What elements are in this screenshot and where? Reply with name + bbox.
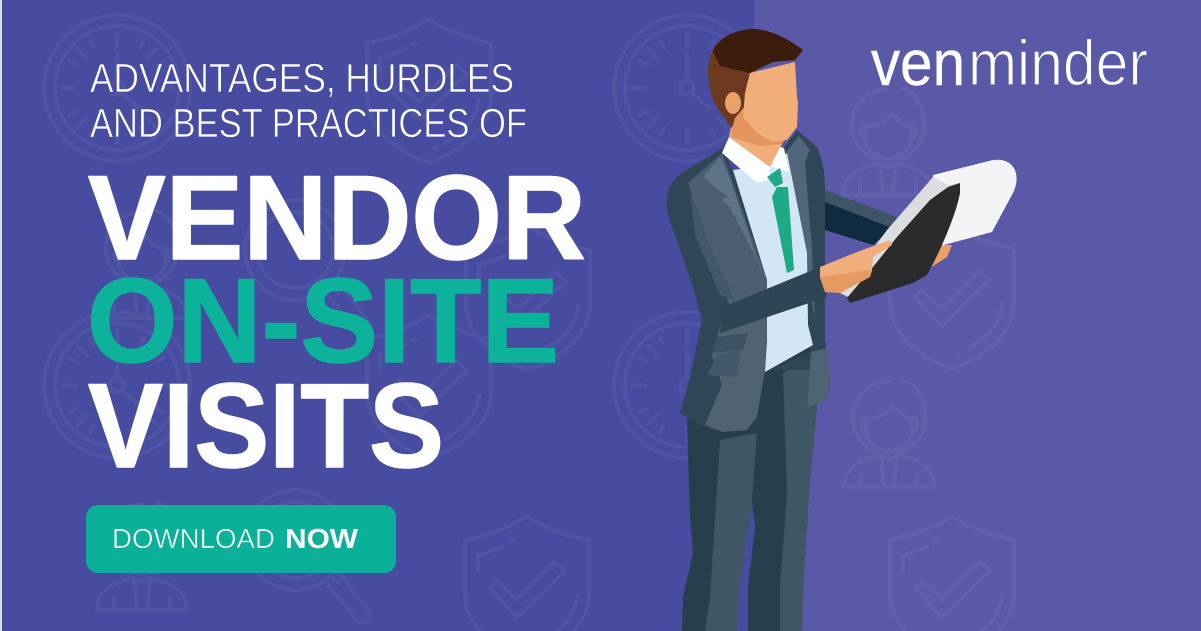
ear bbox=[725, 92, 741, 114]
button background bbox=[86, 505, 396, 573]
icon: shield right column left panel bbox=[466, 226, 590, 370]
tie bbox=[767, 168, 794, 273]
pocket flap bbox=[712, 333, 748, 353]
title line: visits: VISITS bbox=[88, 359, 444, 493]
intro line two: AND BEST PRACTICES OF bbox=[90, 100, 527, 146]
icon: person right panel upper bbox=[843, 88, 934, 195]
logo: venminder: ven bbox=[871, 27, 965, 99]
icon: shield middle bbox=[367, 315, 491, 459]
logo: venminder: minder bbox=[968, 27, 1148, 99]
trousers bbox=[682, 345, 817, 631]
tablet back bbox=[847, 183, 960, 303]
heading: intro lines bbox=[90, 55, 527, 146]
button label: DOWNLOAD bbox=[112, 523, 275, 554]
watermark icons bbox=[44, 15, 1014, 631]
icon: shield right panel lower bbox=[890, 516, 1014, 631]
tablet edge bbox=[840, 177, 960, 297]
icon: clock top left bbox=[44, 15, 190, 161]
left edge strip bbox=[0, 0, 2, 631]
neck bbox=[729, 105, 787, 167]
shirt collar right bbox=[770, 147, 789, 172]
near hand bbox=[820, 240, 892, 293]
background right panel bbox=[754, 0, 1201, 631]
icon: magnifier lower bbox=[245, 490, 370, 622]
icon: person right panel lower bbox=[844, 380, 935, 487]
near forearm bbox=[720, 267, 827, 333]
intro line one: ADVANTAGES, HURDLES bbox=[90, 55, 514, 101]
far hand bbox=[920, 245, 952, 268]
icon: shield bottom left panel bbox=[465, 516, 589, 631]
paper on tablet bbox=[925, 160, 1017, 250]
icon: clock bottom centre bbox=[614, 312, 760, 458]
shirt collar bbox=[722, 137, 770, 183]
icon: shield right panel upper bbox=[890, 225, 1014, 369]
icon: clock top centre bbox=[614, 15, 760, 161]
hair bbox=[708, 29, 803, 128]
icon: clock bottom left bbox=[44, 312, 190, 458]
title line: on-site: ON-SITE bbox=[87, 254, 559, 388]
pocket bbox=[707, 350, 740, 377]
icon: magnifier upper bbox=[245, 200, 370, 332]
title bbox=[87, 151, 586, 493]
icon: shield top bbox=[367, 19, 491, 163]
jacket bbox=[666, 130, 830, 432]
illustration: businessman with tablet bbox=[666, 29, 1017, 631]
title line: vendor: VENDOR bbox=[88, 151, 586, 285]
face bbox=[743, 62, 798, 142]
shirt bbox=[733, 153, 813, 372]
button label: NOW bbox=[285, 523, 359, 554]
icon: person left lower bbox=[97, 503, 188, 610]
neck shadow bbox=[731, 105, 787, 146]
far arm bbox=[825, 190, 897, 245]
button: download now bbox=[86, 505, 396, 573]
background left panel bbox=[0, 0, 755, 631]
icon: person left upper bbox=[97, 211, 188, 318]
